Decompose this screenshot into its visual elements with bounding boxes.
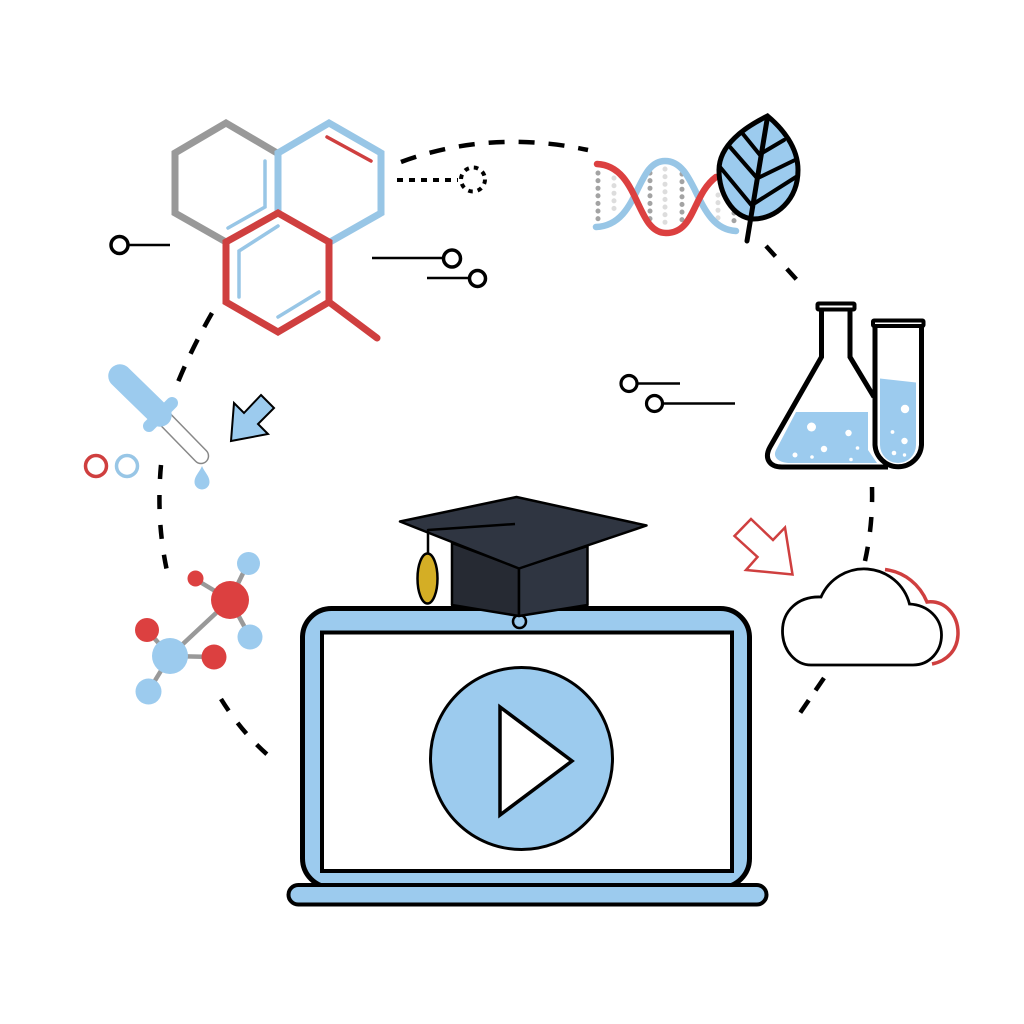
play triangle (500, 707, 572, 815)
arrow: red outline (734, 519, 792, 574)
icon: cloud (782, 569, 958, 665)
connector: flask upper (621, 376, 680, 392)
flask liquid (775, 412, 877, 463)
laptop body (302, 608, 750, 888)
tassel (418, 554, 438, 604)
icon: hexagon molecule (175, 123, 381, 338)
connector: flask lower (646, 396, 735, 412)
connector: right of hexagons upper (372, 250, 460, 267)
icon: graduation cap (400, 497, 646, 616)
dashed cycle path (159, 142, 872, 757)
icon: dropper (120, 376, 210, 490)
dotted connector (397, 168, 485, 192)
laptop screen (322, 632, 732, 871)
laptop base (288, 885, 766, 904)
icon: red ring (86, 456, 106, 476)
icon: blue ring (116, 456, 138, 476)
play button (430, 668, 612, 850)
icon: laptop (288, 608, 766, 904)
icon: test tube (873, 320, 924, 467)
connector: left of hexagons (111, 236, 170, 254)
webcam (513, 615, 526, 628)
flask bubbles (792, 422, 859, 461)
icon: DNA helix (596, 161, 736, 233)
icon: droplet (194, 466, 210, 490)
icon: conical flask (767, 304, 888, 467)
icon: leaf (719, 116, 798, 241)
arrow: blue (231, 395, 274, 441)
connector: right of hexagons lower (427, 270, 486, 286)
icon: molecule network (135, 552, 262, 704)
